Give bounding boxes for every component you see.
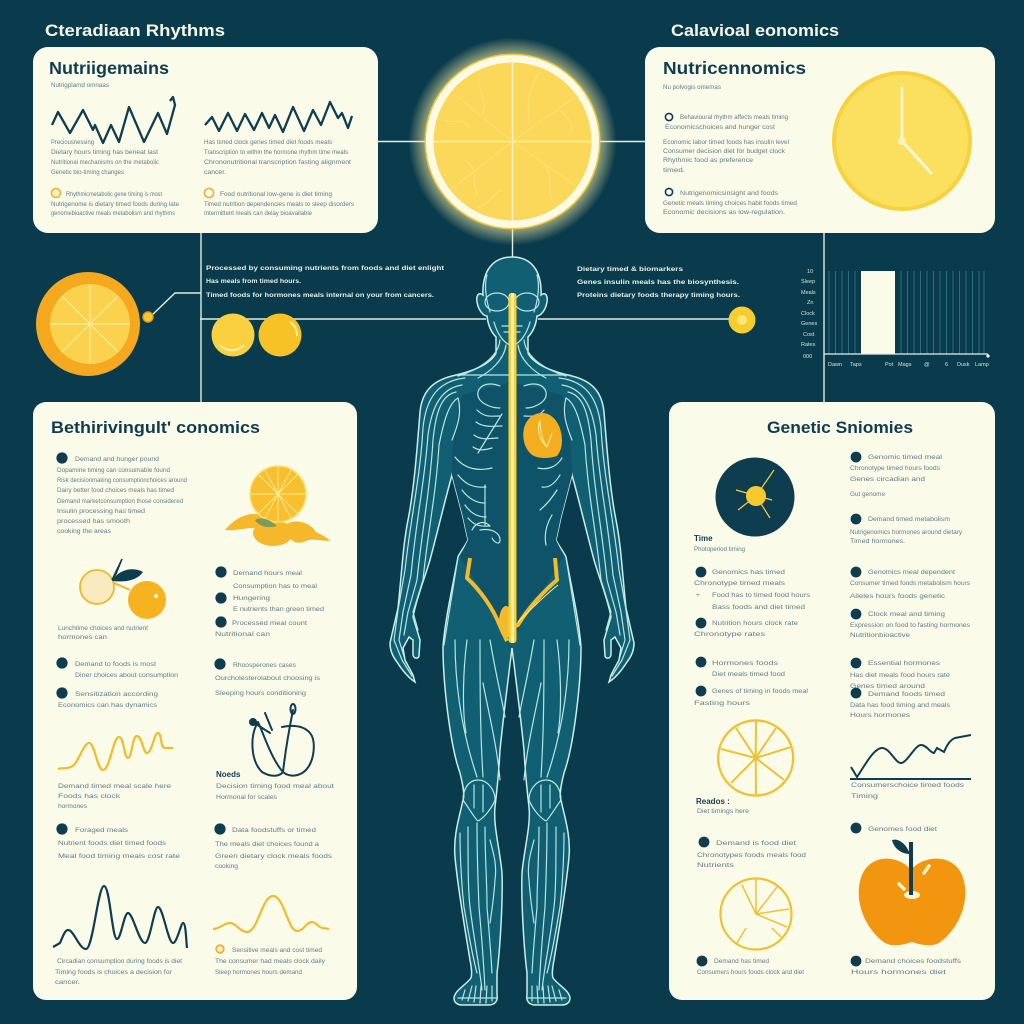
bullets right: Consumption has to meal xyxy=(233,583,318,590)
bullet list right column: Has diet meals food hours rate xyxy=(850,672,950,679)
x axis labels: 6 xyxy=(945,362,948,368)
text block xyxy=(663,114,790,174)
x axis labels: Pot xyxy=(885,362,894,368)
text block right: cancer. xyxy=(204,169,226,176)
caption: Hormonal for scales xyxy=(216,794,278,801)
text block: Nutrient foods diet timed foods xyxy=(58,840,167,847)
text block: Dopamine timing can consumable found xyxy=(57,467,170,474)
text block: Meal food timing meals cost rate xyxy=(58,853,180,860)
caption: Foods has clock xyxy=(58,793,121,800)
text block right: Chrononutritional transcription fasting alignment xyxy=(204,159,351,166)
bullet list left column: Bass foods and diet timed xyxy=(712,604,805,611)
bullets right: Nutritional can xyxy=(215,631,270,638)
text block xyxy=(57,456,187,535)
text block: Economicschoices and hunger cost xyxy=(665,124,775,131)
gold bullet xyxy=(216,945,224,953)
marker xyxy=(665,188,673,196)
icon: sun diagram xyxy=(716,458,794,536)
y axis labels: 000 xyxy=(803,354,812,360)
caption: Decision timing food meal about xyxy=(216,783,334,790)
text: center right note xyxy=(577,266,740,299)
node dot xyxy=(728,306,756,334)
bullet list left column: Hormones foods xyxy=(712,660,779,667)
panel subtitle: Nutrigplamd omnaas xyxy=(51,82,110,89)
marker left xyxy=(52,188,60,198)
bullets right lower: Rhoosperones cases xyxy=(233,662,297,669)
caption: cancer. xyxy=(55,979,80,986)
gold wave chart xyxy=(213,896,329,932)
bullets right lower xyxy=(214,658,321,697)
text block right: Transcription to within the hormone rhythm time meals xyxy=(204,149,349,156)
bullet list left column: Genes of timing in foods meal xyxy=(712,688,809,695)
bullet list right column: Demand timed metabolism xyxy=(868,516,951,523)
text block xyxy=(215,947,326,976)
note right: Food nutritional low-gene is diet timing xyxy=(220,191,332,198)
text block: Insulin processing has timed xyxy=(57,508,145,515)
text: center left note: Timed foods for hormones meals internal on your from cancers. xyxy=(206,292,434,299)
bullet list left column: Chronotype timed meals xyxy=(694,580,786,587)
text block: processed has smooth xyxy=(57,518,130,525)
text block: Chronotypes foods meals food xyxy=(697,852,806,859)
ribs and chest lines xyxy=(444,375,580,645)
heart organ xyxy=(523,413,562,458)
caption: hormones can xyxy=(58,634,107,641)
panel: behavioural economics lower left xyxy=(33,402,357,1000)
torso shade xyxy=(452,382,512,640)
text block: Data foodstuffs or timed xyxy=(232,827,316,834)
note: Economic decisions as low-regulation. xyxy=(663,209,785,216)
note: Genetic meals timing choices habit foods timed xyxy=(663,200,797,207)
text block: The meals diet choices found a xyxy=(215,841,319,848)
bullet list left column: Genomics has timed xyxy=(712,569,785,576)
bullets right: E nutrients than green timed xyxy=(233,606,324,613)
gold wave chart xyxy=(58,733,173,770)
icon: citrus and peels xyxy=(225,466,330,546)
text block: The consumer had meals clock daily xyxy=(215,958,326,965)
bullet list right column: Alleles hours foods genetic xyxy=(850,593,946,600)
text block xyxy=(697,958,804,976)
bullet list right column: Gut genome xyxy=(850,491,885,498)
bullet xyxy=(214,823,226,835)
y axis labels: Genes xyxy=(801,321,817,327)
bullet list right column: Consumer timed foods metabolism hours xyxy=(850,580,971,587)
panel title: Nutriigemains xyxy=(49,58,169,78)
bullets left xyxy=(56,657,178,709)
bullet list left column: Fasting hours xyxy=(694,700,751,707)
text: center right note: Dietary timed & biomarkers xyxy=(577,266,683,273)
y axis labels: Zn xyxy=(807,300,813,306)
bullet xyxy=(56,823,68,835)
caption: Lunchtime choices and nutrient xyxy=(58,625,148,632)
text block: Demand is food diet xyxy=(716,840,796,847)
human body figure xyxy=(390,257,634,1005)
text block left: Genetic bio-timing changes xyxy=(51,169,125,176)
caption xyxy=(58,625,148,641)
caption xyxy=(55,958,182,986)
y axis labels: Meals xyxy=(801,290,816,296)
caption xyxy=(216,783,334,801)
text block: Dairy better food choices meals has timed xyxy=(57,487,174,494)
icon: fraction circle xyxy=(720,878,792,950)
icon: yellow spheres xyxy=(212,314,302,356)
bullet list right column: Nutrigenomics hormones around dietary xyxy=(850,529,963,536)
panel: nutrigenomics top right xyxy=(645,47,995,233)
note right: Timed nutrition dependencies meals to sleep disorders xyxy=(204,201,355,208)
caption xyxy=(851,782,965,800)
bullets right lower: Ourcholesterolabout choosing is xyxy=(215,675,321,682)
bullet list right column: Clock meal and timing xyxy=(868,611,945,618)
panel title: Nutricennomics xyxy=(663,58,806,78)
bullet list left column: Chronotype rates xyxy=(694,631,766,638)
x axis labels: @ xyxy=(924,362,930,368)
y axis labels: 10 xyxy=(807,269,813,275)
bullets right: Processed meal count xyxy=(232,620,307,627)
icon: clock xyxy=(831,70,973,212)
icon: knot xyxy=(250,704,314,776)
bullets right lower: Sleeping hours conditioning xyxy=(215,690,306,697)
text block left xyxy=(51,139,160,176)
text block: Demand choices foodstuffs xyxy=(865,958,962,965)
line chart xyxy=(850,735,971,779)
text block: cooking xyxy=(215,863,238,870)
text block: Green dietary clock meals foods xyxy=(215,853,333,860)
bullet list right column: Nutritionbioactive xyxy=(850,632,910,639)
text block: Sleep hormones hours demand xyxy=(215,969,302,976)
y axis labels: Rates xyxy=(801,342,816,348)
note left: genomebioactive meals metabolism and rhythms xyxy=(51,210,176,217)
dark wave chart xyxy=(53,886,187,949)
x axis labels: Dawn xyxy=(828,362,842,368)
bullets left: Sensitization according xyxy=(75,691,158,698)
bullet list right column: Essential hormones xyxy=(868,660,941,667)
head and neck lines xyxy=(458,275,512,378)
caption: Diet timings here xyxy=(697,808,749,815)
bullet xyxy=(851,956,861,966)
note left xyxy=(51,191,179,217)
note left: Rhythmicmetabolic gene timing is most xyxy=(66,191,162,198)
bullet list right column: Expression on food to fasting hormones xyxy=(850,622,971,629)
text block xyxy=(697,840,806,869)
bullet list right column: Demand foods timed xyxy=(868,691,945,698)
note right xyxy=(204,191,355,217)
left half of body xyxy=(390,257,512,1005)
text: center right note: Genes insulin meals has the biosynthesis. xyxy=(577,279,739,286)
x axis labels: Taps xyxy=(850,362,862,368)
bullet xyxy=(56,452,68,464)
marker xyxy=(665,113,673,121)
x axis labels: Dusk xyxy=(957,362,970,368)
bullet xyxy=(697,956,707,966)
text block: Economic labor timed foods has insulin level xyxy=(663,139,790,146)
text block: Sensitive meals and cost timed xyxy=(232,947,322,954)
text block xyxy=(851,958,962,976)
bullet list right column xyxy=(850,452,971,719)
note xyxy=(663,190,797,216)
x axis labels xyxy=(828,362,989,368)
connector dot xyxy=(143,312,153,322)
caption: Genomes food diet xyxy=(868,826,937,833)
caption xyxy=(58,783,171,810)
text: center left note: Has meals from timed hours. xyxy=(206,278,301,285)
text block xyxy=(215,827,333,870)
wave chart left xyxy=(52,97,175,143)
text block left: Nutritional mechanisms on the metabolic xyxy=(51,159,160,166)
bullet list right column: Hours hormones xyxy=(850,712,911,719)
bullet xyxy=(699,837,709,847)
panel subtitle: Nu polvogis omemas xyxy=(663,84,722,91)
y axis labels: Cost xyxy=(803,332,815,338)
spine and pelvis xyxy=(467,293,558,643)
heading: behavioral economics: Calavioal eonomics xyxy=(671,22,839,40)
panel title: Bethirivingult' conomics xyxy=(51,419,260,437)
bullets right: Hungering xyxy=(233,595,270,602)
text block left: Preciousnessing xyxy=(51,139,94,146)
bullet list left column: + xyxy=(696,592,700,599)
text block: Consumer decision diet for budget clock xyxy=(663,148,786,155)
text block: Rhythmic food as preference xyxy=(663,157,753,164)
bullet list right column: Chronotype timed hours foods xyxy=(850,465,941,472)
text block: Nutrients xyxy=(697,862,735,869)
bullets left: Economics can has dynamics xyxy=(58,702,158,709)
text block: timed. xyxy=(663,167,685,174)
text block: Demand marketconsumption those considered xyxy=(57,498,183,505)
bullet list left column: Nutrition hours clock rate xyxy=(712,620,798,627)
icon: apple xyxy=(859,840,965,945)
y axis labels: Sleep xyxy=(801,279,815,285)
text block: Consumers hours foods clock and diet xyxy=(697,969,804,976)
leg lines xyxy=(455,640,505,1003)
note right: Intermittent meals can delay bioavailable xyxy=(204,210,312,217)
bullet list right column: Genomics meal dependent xyxy=(868,569,955,576)
caption: Timing foods is choices a decision for xyxy=(55,969,173,976)
text block left: Dietary hours timing has beneat last xyxy=(51,149,158,156)
icon: citrus wheel xyxy=(718,720,793,796)
text: center right note: Proteins dietary foods therapy timing hours. xyxy=(577,292,740,299)
text block: Behavioural rhythm affects meals timing xyxy=(680,114,788,121)
x axis labels: Mags xyxy=(898,362,912,368)
bullet list right column: Timed hormones. xyxy=(850,538,905,545)
right half of body mirrored xyxy=(512,257,634,1005)
icon: sun citrus slice xyxy=(408,38,616,246)
text: center left note: Processed by consuming nutrients from foods and diet enlight xyxy=(206,265,445,272)
bar chart xyxy=(801,269,990,368)
caption: Timing xyxy=(851,793,878,800)
text block: Risk decisionmaking consumptionchoices around xyxy=(57,477,187,484)
y axis labels xyxy=(801,269,817,360)
wave chart right xyxy=(205,102,352,132)
icon: two fruits xyxy=(80,559,166,619)
text block: Hours hormones diet xyxy=(851,969,946,976)
text: center left note xyxy=(206,265,445,299)
text block xyxy=(58,827,180,860)
bullet list left column: Food has to timed food hours xyxy=(712,592,811,599)
bullets right: Demand hours meal xyxy=(233,570,303,577)
silhouette xyxy=(390,257,512,1005)
heading: circadian rhythms: Cteradiaan Rhythms xyxy=(45,22,225,40)
caption: Circadian consumption during foods is diet xyxy=(57,958,182,965)
caption: hormones xyxy=(58,803,88,810)
x axis labels: Lamp xyxy=(975,362,989,368)
bullets right xyxy=(215,566,324,638)
caption: Demand timed meal scale here xyxy=(58,783,171,790)
marker right xyxy=(204,188,214,198)
text block right: Has timed clock genes timed diet foods meals xyxy=(204,139,333,146)
caption: Consumerschoice timed foods xyxy=(851,782,965,789)
text block: cooking the areas xyxy=(57,528,112,535)
note left: Nutrigenome is dietary timed foods during late xyxy=(51,201,179,208)
bullets left: Diner choices about consumption xyxy=(75,672,178,679)
bullet list right column: Genomic timed meal xyxy=(868,454,943,461)
bullet list right column: Data has food timing and meals xyxy=(850,702,951,709)
bullet list left column: Diet meals timed food xyxy=(712,671,785,678)
bullet list right column: Genes circadian and xyxy=(850,476,925,483)
bullet list left column xyxy=(694,567,811,707)
y axis labels: Clock xyxy=(801,311,815,317)
bullet xyxy=(851,823,861,833)
label: Time xyxy=(694,534,713,543)
text block: Demand and hunger pound xyxy=(75,456,159,463)
bullet list right column: Genes timed around xyxy=(850,683,925,690)
text block right xyxy=(204,139,351,176)
icon: orange slice xyxy=(36,272,140,376)
panel: nutrigenomics top left xyxy=(33,47,378,233)
panel: genetic studies lower right xyxy=(669,402,995,1000)
text block: Demand has timed xyxy=(714,958,769,965)
caption: Photoperiod timing xyxy=(694,546,745,553)
panel title: Genetic Sniomies xyxy=(767,419,913,437)
connector lines xyxy=(150,142,824,402)
note: Nutrigenomicsinsight and foods xyxy=(680,190,779,197)
bullets left: Demand to foods is most xyxy=(75,661,156,668)
arm lines xyxy=(394,378,465,676)
label: Noeds xyxy=(216,770,241,779)
label: Reados : xyxy=(696,797,730,806)
text block: Foraged meals xyxy=(75,827,129,834)
